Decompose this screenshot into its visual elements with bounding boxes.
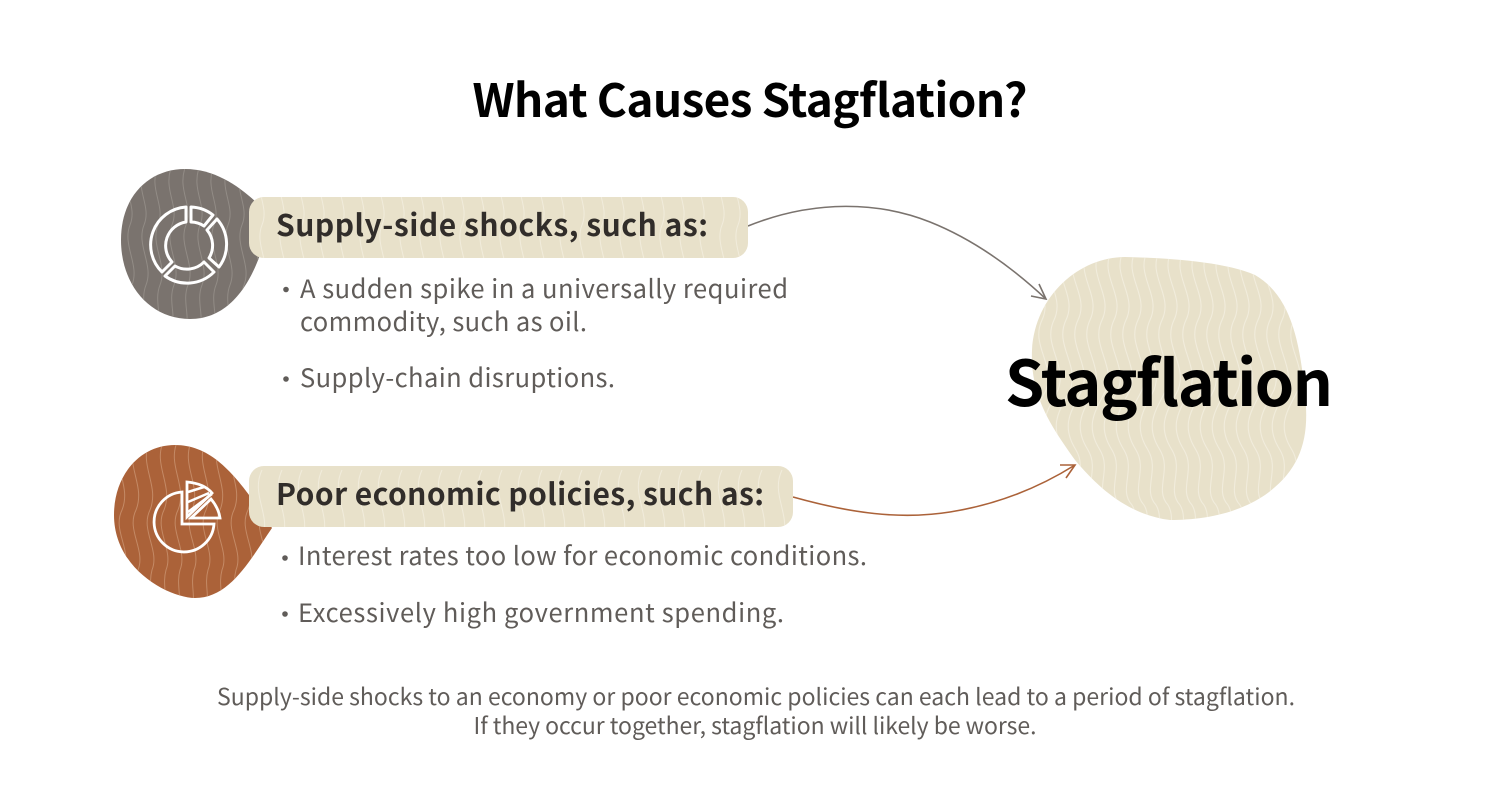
footer note: If they occur together, stagflation will likely be worse.	[474, 707, 1036, 741]
bullet list: poor economic policies	[282, 536, 867, 630]
icon: pie chart	[154, 482, 220, 552]
bullet list: supply-side shocks: Supply-chain disruptions.	[300, 358, 615, 395]
bullet list: supply-side shocks: commodity, such as oil.	[300, 302, 587, 339]
icon: segmented donut	[151, 207, 227, 283]
footer note: Supply-side shocks to an economy or poor economic policies can each lead to a period of stagflation.	[217, 678, 1295, 712]
bullet list: poor economic policies: Interest rates too low for economic conditions.	[298, 536, 867, 573]
footer note	[217, 678, 1295, 741]
heading: supply-side shocks: Supply-side shocks, such as:	[276, 201, 708, 245]
heading: poor economic policies: Poor economic policies, such as:	[276, 470, 764, 514]
blob: grey icon background	[121, 169, 260, 319]
bullet list: supply-side shocks: A sudden spike in a universally required	[300, 269, 788, 306]
title: What Causes Stagflation?	[472, 65, 1028, 131]
label box: poor economic policies	[249, 466, 793, 527]
blob: brown icon background	[114, 445, 272, 598]
arrow: supply-side shocks to stagflation	[748, 206, 1046, 299]
stagflation blob	[1032, 250, 1306, 535]
bullet list: poor economic policies: Excessively high government spending.	[298, 593, 784, 630]
stagflation label: Stagflation	[1005, 334, 1333, 425]
bullet list: supply-side shocks	[283, 269, 788, 395]
group: supply-side shocks	[121, 165, 788, 395]
label box: supply-side shocks	[249, 197, 748, 258]
group: poor economic policies	[114, 440, 867, 640]
arrow: poor economic policies to stagflation	[793, 465, 1075, 515]
